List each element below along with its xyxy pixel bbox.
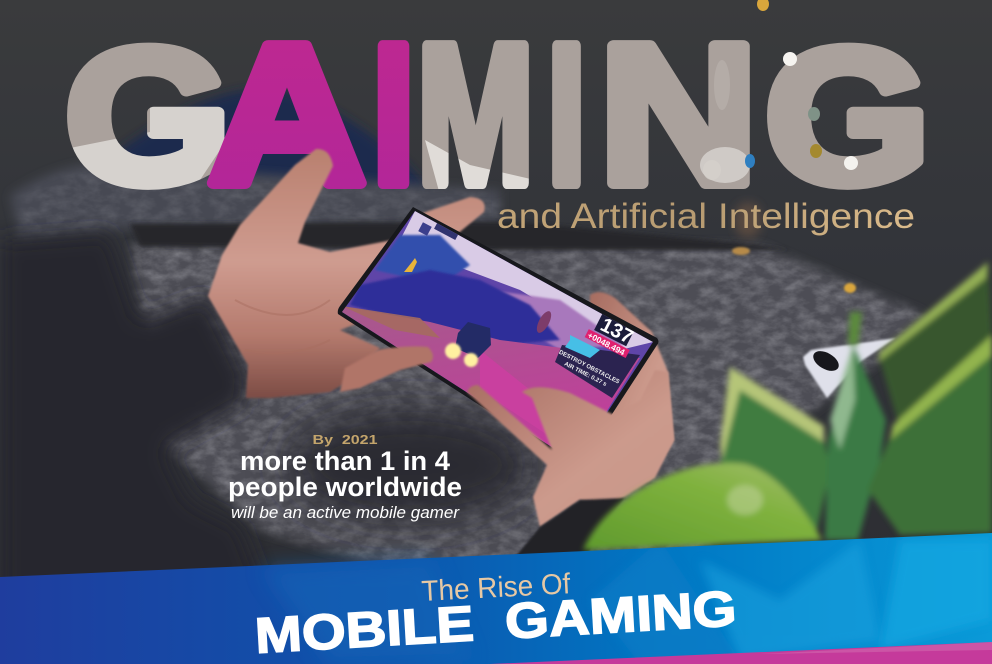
dark shadow around the caption [285,407,535,523]
banner small heading: The Rise Of [421,568,572,608]
title: GAIMING: G [765,10,930,223]
right large leaf [868,335,992,535]
phone body [338,207,658,468]
title: GAIMING [65,4,930,226]
position marker [404,258,417,272]
car [455,322,491,358]
title: GAIMING: A [208,4,366,226]
road [342,307,640,447]
background scene [0,88,924,577]
title: GAIMING: I [372,4,415,226]
navy cushion behind title [120,89,430,200]
tree [536,311,552,333]
left hand palm and thumb [208,149,485,398]
subtitle: and Artificial Intelligence [497,197,915,236]
game screen [342,211,653,448]
statistic caption [228,433,462,522]
purple mountains [350,270,560,345]
title: GAIMING: I [547,4,586,226]
title: GAIMING: M [417,4,534,226]
shadow band under the title [130,222,790,250]
pause icon [418,222,432,236]
blue clouds [375,233,471,276]
fur texture [22,174,922,560]
pink mountains [501,290,624,348]
top right leaf [880,262,992,430]
right hand behind phone [590,292,674,480]
upper fur band [10,163,500,240]
score box: 137 [597,314,636,349]
bokeh lights [732,0,856,293]
fur reflection in banner [262,560,470,664]
statistic caption: people worldwide [228,472,462,502]
camera [810,347,842,375]
hud panel [434,223,458,240]
orange road edge [342,306,440,338]
dark hud corner [555,345,640,398]
centre leaf [825,345,886,540]
chevrons [565,335,600,358]
plant leaves [583,262,992,550]
left thumb over phone [340,346,433,392]
title: GAIMING: G [65,10,231,223]
hud caption: AIR TIME: 0.27 s [563,361,608,388]
bottom round leaf [583,463,822,550]
title: GAIMING: N [599,4,758,226]
left pointed leaf [720,367,830,540]
pink band [490,642,992,664]
white phone on blanket [803,338,896,398]
sky [400,211,653,350]
headlights [445,343,461,359]
pink score tag: +0048.494 [586,330,627,357]
smartphone [338,207,658,450]
banner main heading: MOBILE GAMING [253,580,738,664]
leaf reflections in banner [604,540,988,656]
small back leaf [848,312,862,345]
statistic caption: By 2021 [312,433,378,447]
main fur blanket [130,245,925,570]
hud caption: DESTROY OBSTACLES [558,350,620,386]
left dark sleeve [0,232,265,600]
statistic caption: more than 1 in 4 [240,446,450,476]
right hand fingers over phone [467,370,674,527]
statistic caption: will be an active mobile gamer [231,503,460,522]
bokeh over title [703,52,858,180]
right sleeve [500,498,625,575]
banner [0,533,992,664]
